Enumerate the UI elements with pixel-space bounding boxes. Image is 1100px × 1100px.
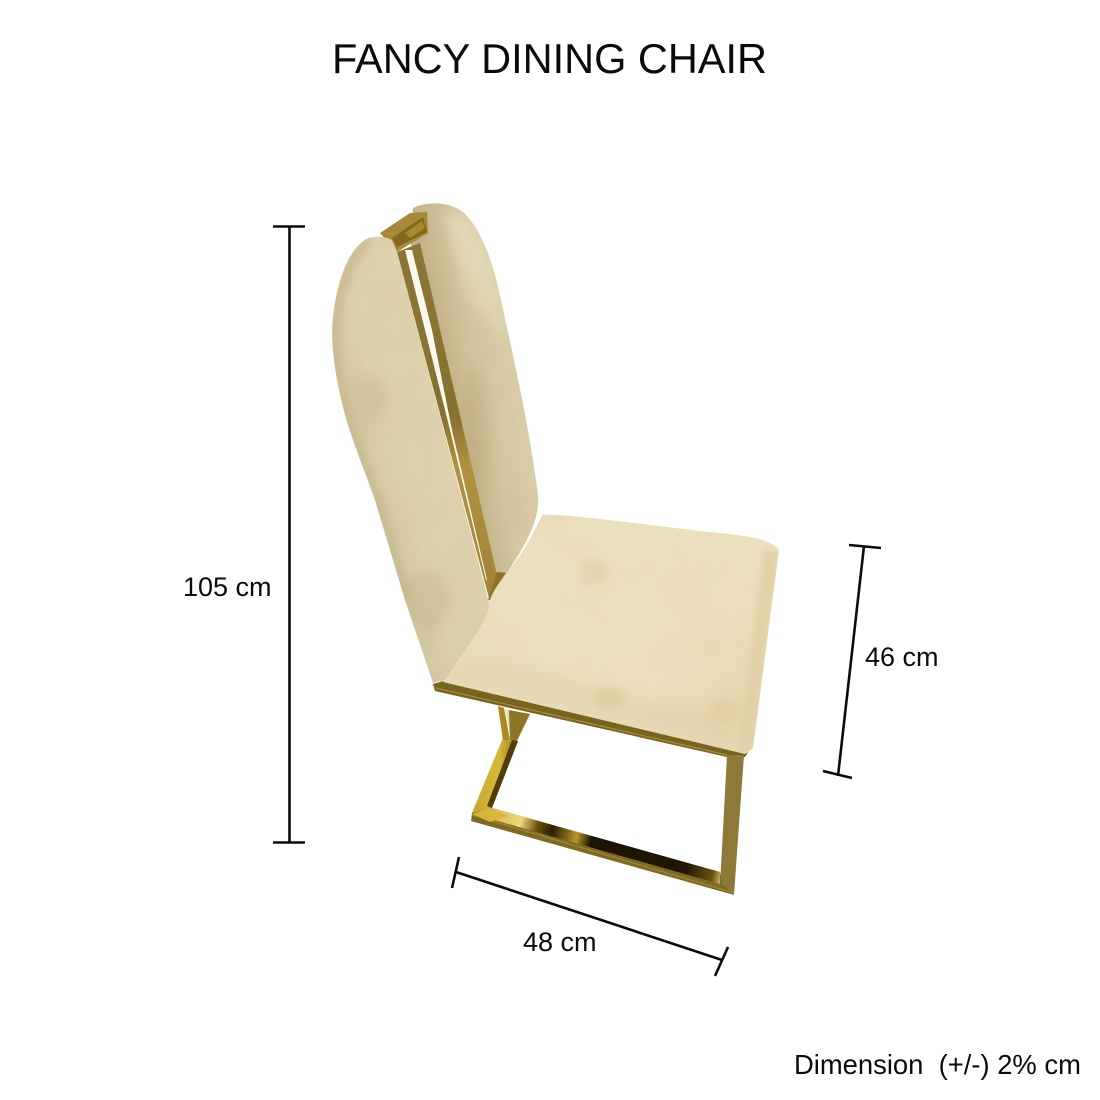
dimension: height 105 cm [183, 226, 305, 843]
gold base frame [471, 740, 744, 895]
dimension: seat height 46 cm [823, 545, 939, 778]
base rail [471, 808, 734, 895]
rear back cushion [410, 203, 538, 574]
front leg [720, 755, 744, 895]
dimension: height 105 cm: 105 cm [183, 572, 272, 602]
infographic page [185, 44, 1080, 1080]
gold back frame [380, 212, 508, 602]
title: FANCY DINING CHAIR [332, 35, 767, 82]
tolerance note: Dimension (+/-) 2% cm [794, 1049, 1081, 1080]
seat cushion [440, 510, 782, 758]
dimension: seat height 46 cm: 46 cm [865, 642, 939, 672]
front back cushion [330, 232, 495, 687]
gold rear struts [498, 706, 530, 743]
left arm [472, 740, 518, 813]
dimension: width 48 cm: 48 cm [523, 927, 597, 957]
chair photo illustration [330, 200, 782, 895]
gold seat underframe [433, 681, 748, 757]
dimension: width 48 cm [452, 857, 728, 976]
